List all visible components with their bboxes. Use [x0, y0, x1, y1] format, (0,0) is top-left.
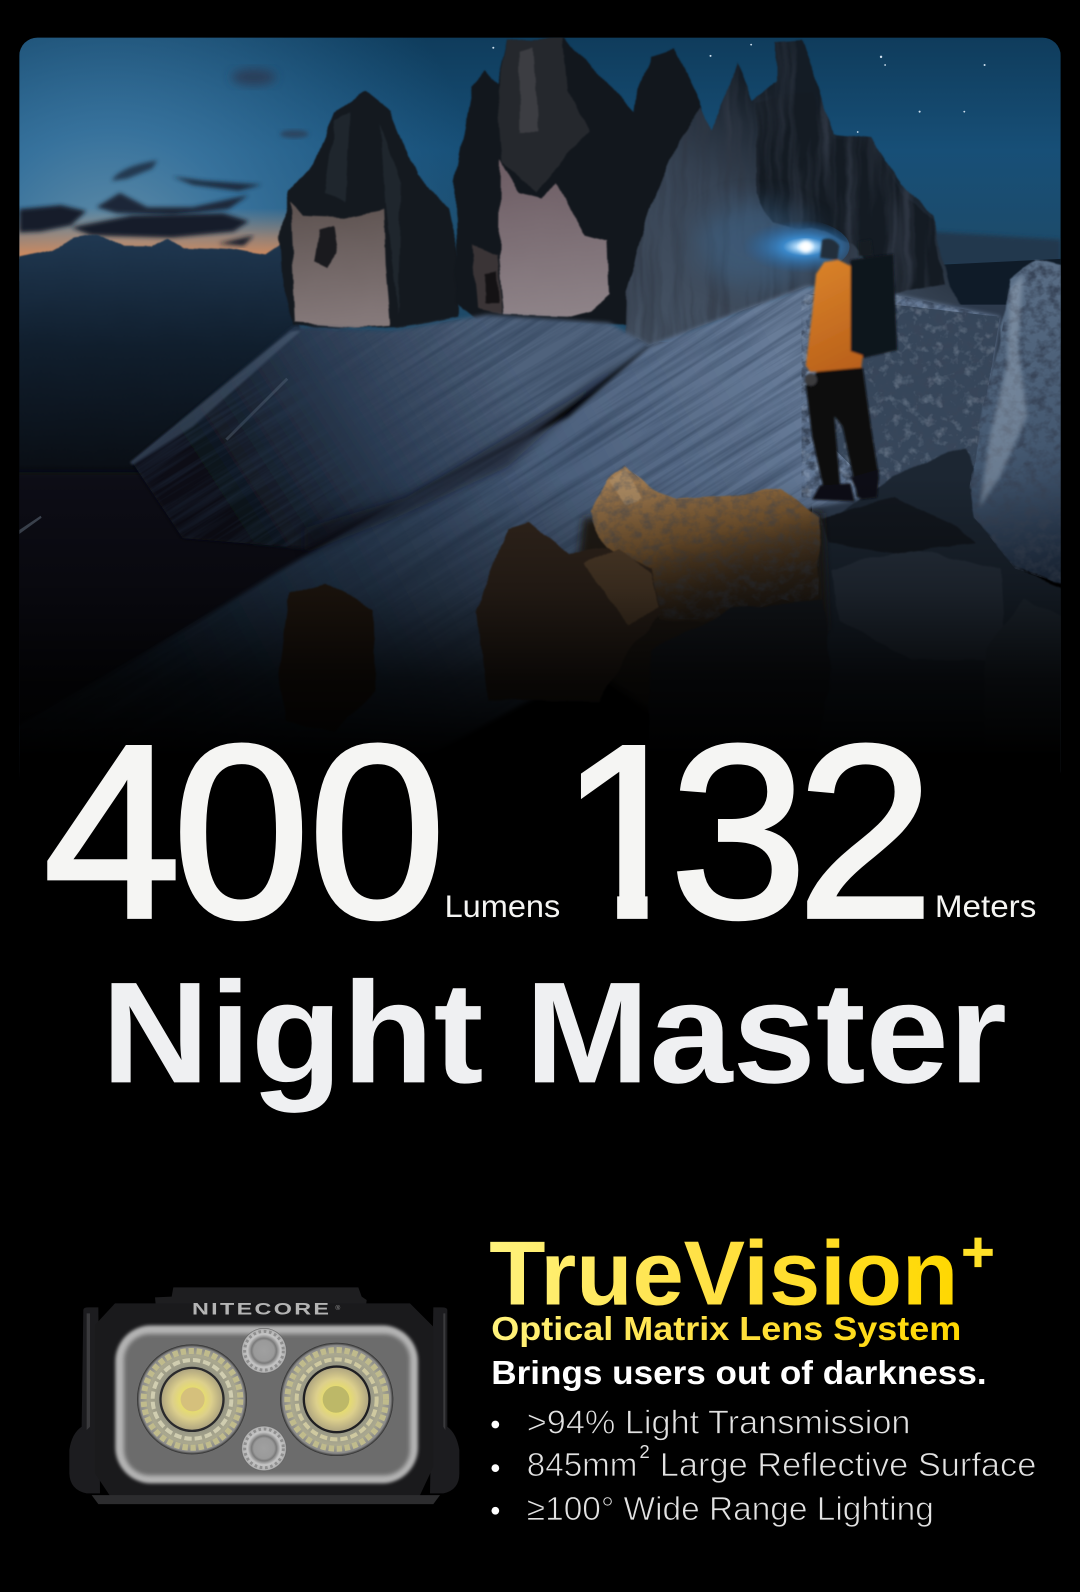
headlamp beam	[750, 222, 850, 271]
headlamp light core	[800, 241, 812, 253]
lit rock face	[499, 160, 609, 317]
bullet 2: 845mm	[527, 1447, 637, 1484]
rock boulder right	[970, 259, 1061, 584]
warm lit ground	[279, 465, 828, 704]
left lens	[137, 1344, 247, 1454]
bullet 1: >94% Light Transmission	[527, 1405, 910, 1442]
light ridge streaks	[130, 331, 300, 465]
upper slope band	[132, 315, 650, 548]
dark gully	[305, 355, 629, 553]
logo	[192, 1299, 340, 1318]
stat: 132 meters: 32	[670, 695, 934, 970]
clouds	[19, 69, 309, 246]
rock massif right	[619, 41, 974, 355]
distant mountains left	[19, 234, 300, 473]
headlamp strap brackets	[69, 1307, 459, 1493]
bullet 2	[491, 1441, 1036, 1484]
far ridge right	[929, 231, 1061, 266]
rock tower centre	[455, 38, 711, 325]
dark base under ground	[575, 508, 828, 670]
slope backing	[812, 305, 1015, 528]
product: headlamp	[69, 1287, 459, 1504]
subheading: lens system: Optical Matrix Lens System	[491, 1311, 961, 1348]
headlamp top button	[155, 1287, 367, 1315]
bottom fade	[20, 493, 1060, 780]
lower slope band	[140, 284, 1002, 720]
stat: 132 meters: Meters	[935, 889, 1036, 924]
logo: NITECORE	[192, 1299, 331, 1318]
bullet 2: Large Reflective Surface	[660, 1447, 1036, 1484]
knob top	[241, 1328, 287, 1373]
bullet 3: ≥100° Wide Range Lighting	[527, 1491, 934, 1528]
scree slope	[19, 254, 1061, 1113]
heading: Night Master: Night Master	[102, 952, 1007, 1113]
lit rock face	[290, 201, 391, 327]
rock tower left	[279, 91, 460, 327]
stars	[492, 44, 986, 133]
bullet 2: 2	[639, 1441, 650, 1462]
panel: night mountain photo	[19, 38, 1061, 1113]
headlamp body	[95, 1303, 433, 1498]
glowing frame	[115, 1325, 418, 1483]
tagline: Brings users out of darkness.	[491, 1355, 987, 1392]
stat: 132 meters	[559, 695, 1036, 970]
hiker	[805, 238, 897, 502]
stat: 400 lumens: Lumens	[445, 889, 560, 924]
knob bottom	[241, 1426, 287, 1471]
logo: ®	[335, 1304, 340, 1312]
logo: TrueVision+: TrueVision	[489, 1223, 958, 1325]
feature list	[491, 1405, 1036, 1528]
stat: 132 meters: 1	[559, 695, 696, 970]
foreground rocks	[820, 448, 1061, 772]
right lens	[280, 1343, 393, 1456]
stat: 400 lumens: 400	[44, 695, 446, 970]
sky	[19, 38, 1061, 342]
